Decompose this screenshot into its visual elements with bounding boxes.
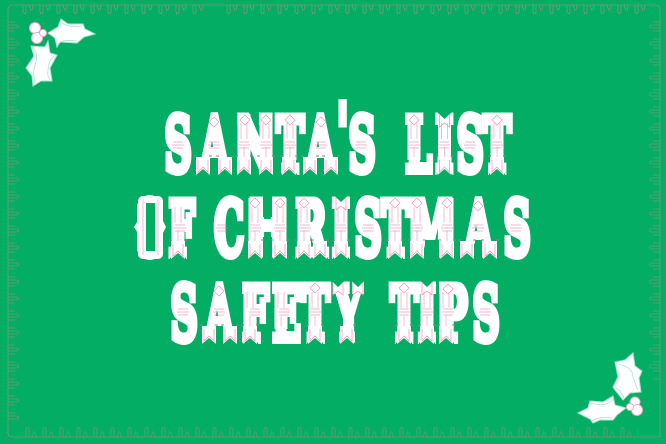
title line 2: OF CHRISTMAS	[134, 184, 531, 273]
title line 3: SAFETY TIPS	[171, 269, 500, 358]
icon: holly top-left	[26, 19, 95, 86]
icon: holly bottom-right	[578, 353, 642, 423]
letter O body	[134, 196, 166, 259]
title line 1: SANTA'S LIST	[165, 87, 511, 189]
